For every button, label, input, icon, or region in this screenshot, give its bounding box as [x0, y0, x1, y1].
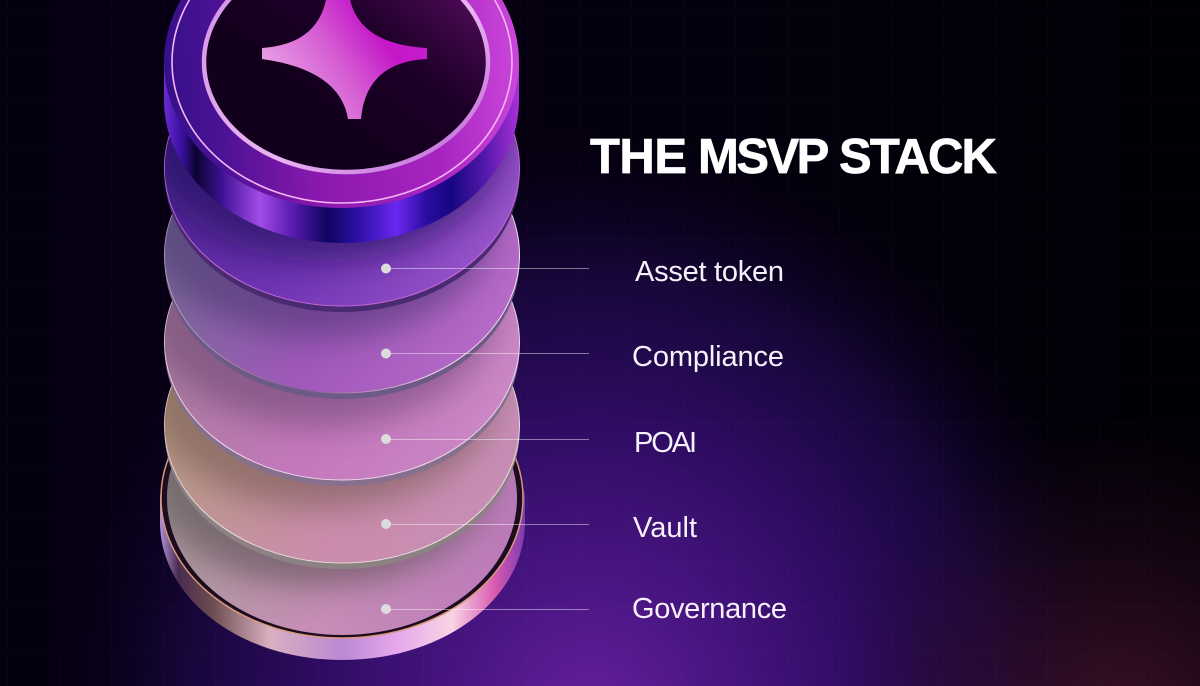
title: MSVP — [698, 130, 829, 184]
disk: compliance — [164, 214, 520, 399]
title: STACK — [839, 130, 997, 184]
top coin with star — [164, 0, 519, 243]
callout: vault — [381, 519, 589, 529]
label: asset token: Asset token — [635, 256, 784, 288]
label: compliance: Compliance — [632, 341, 784, 373]
label: POAI: POAI — [634, 427, 697, 459]
base disk: governance — [160, 458, 525, 660]
label: governance: Governance — [632, 593, 787, 625]
disk: vault — [164, 386, 520, 569]
label: vault: Vault — [633, 512, 697, 544]
disk: asset token — [164, 132, 520, 312]
disk stack — [140, 0, 525, 660]
icon: four-point star — [262, 0, 427, 119]
callout: compliance — [381, 348, 589, 358]
disk: POAI — [164, 300, 520, 486]
title: THE — [590, 130, 686, 184]
callout: asset token — [381, 264, 589, 274]
callout: governance — [381, 604, 589, 614]
callout: POAI — [381, 434, 589, 444]
